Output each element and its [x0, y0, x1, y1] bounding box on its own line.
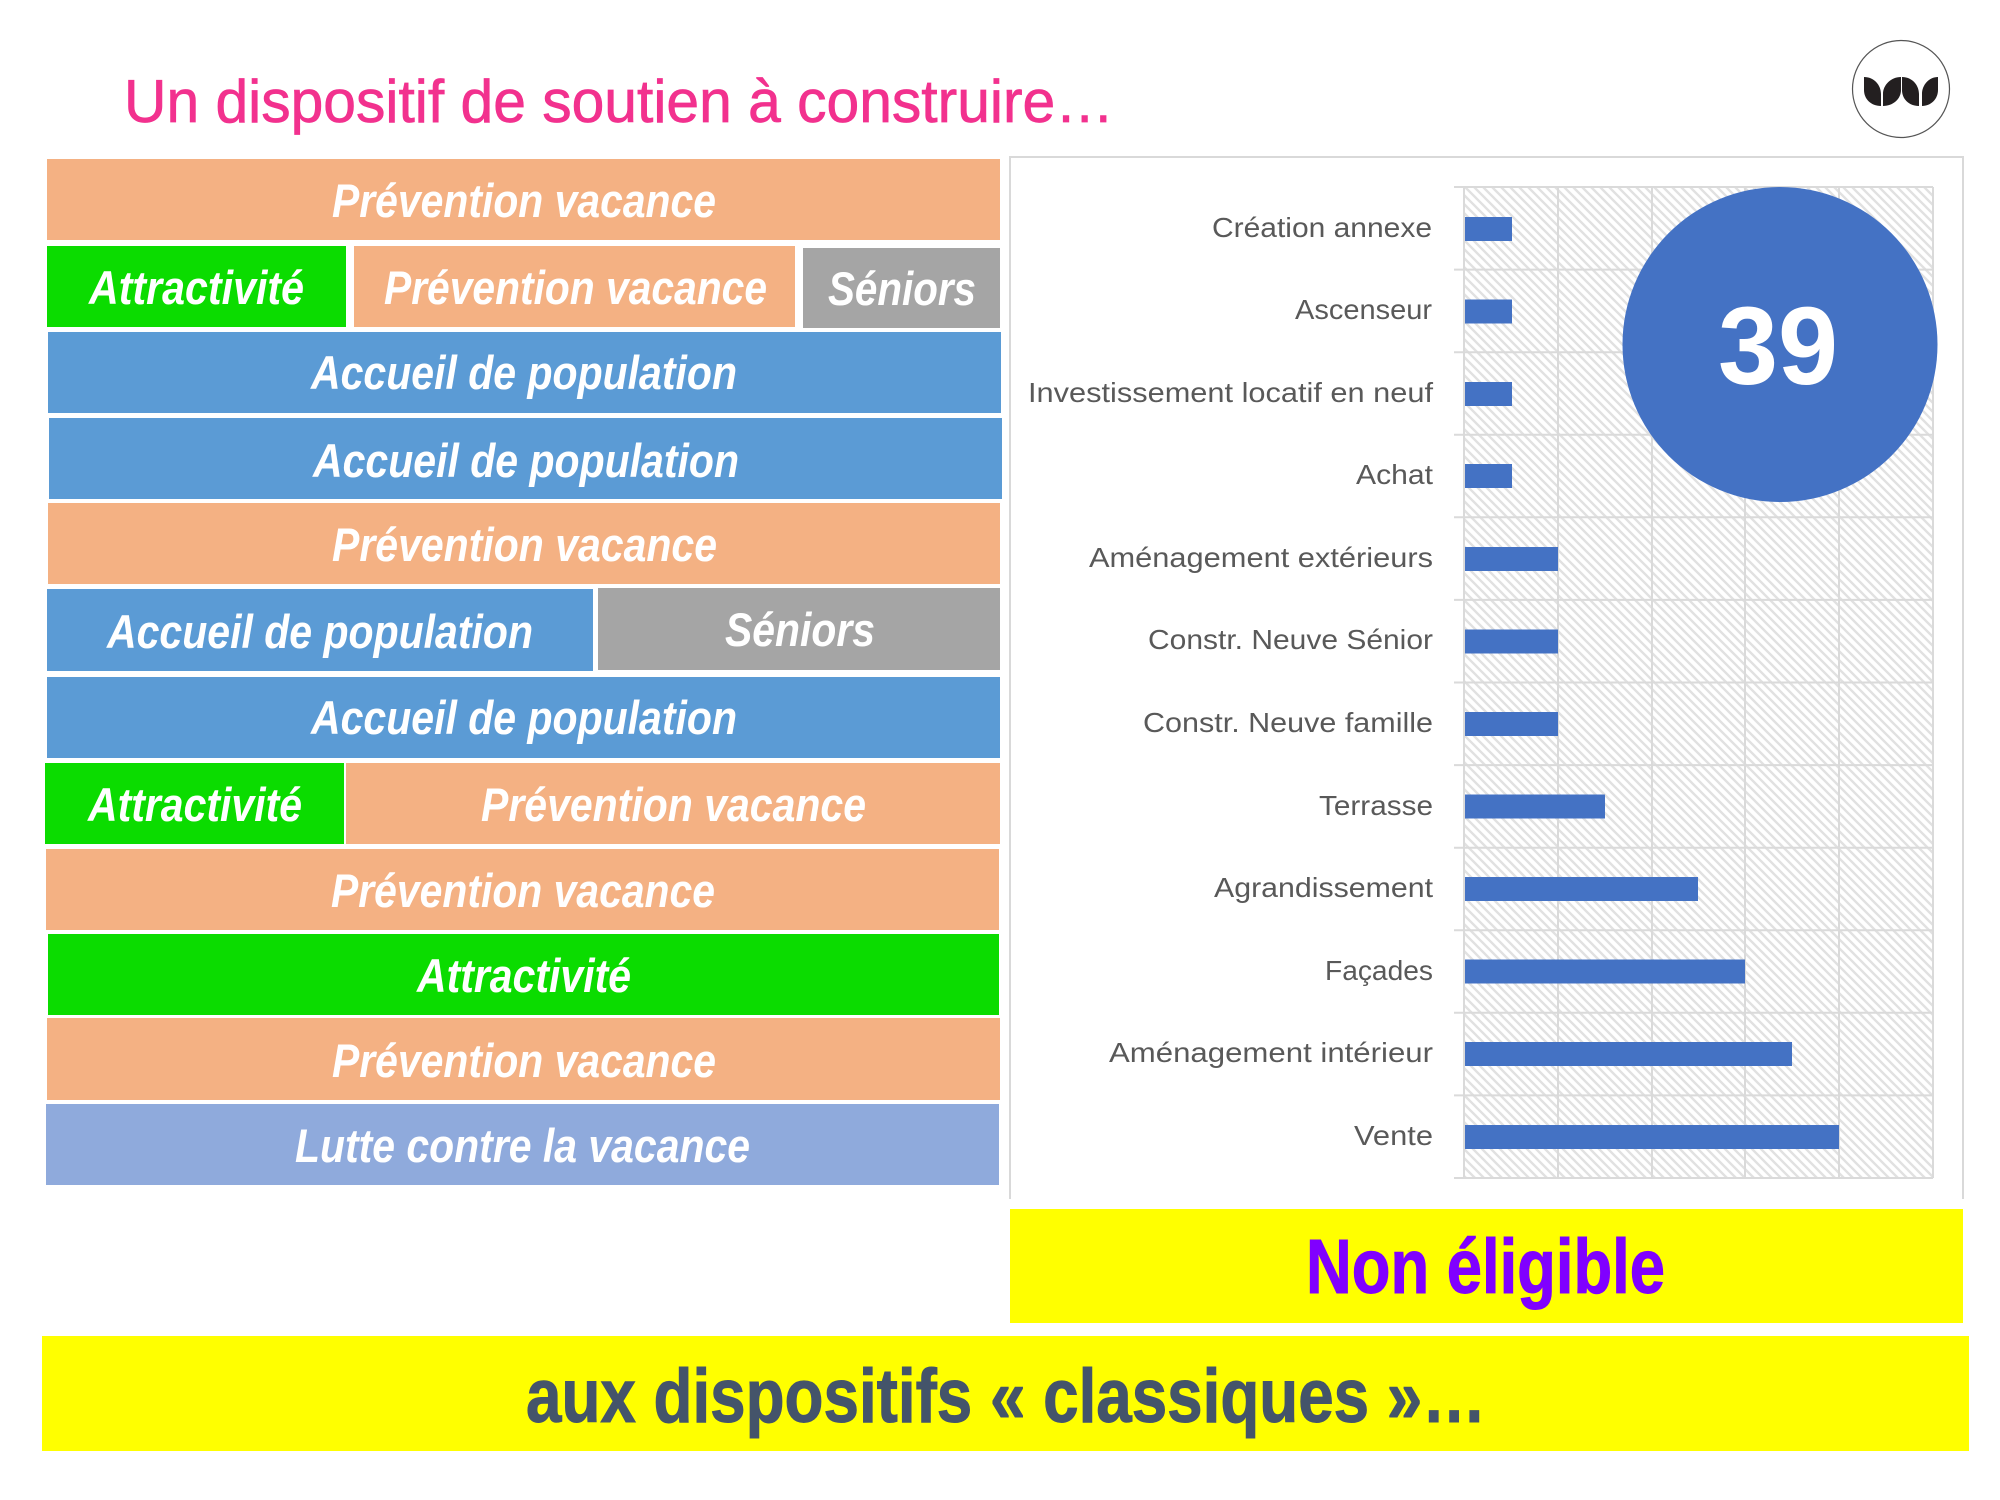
row 12: Lutte contre la vacance [46, 1104, 999, 1185]
row 1: Prévention vacance: Prévention vacance [332, 174, 716, 227]
row 9: Prévention vacance [46, 849, 999, 930]
row 6: Accueil de population [47, 589, 593, 671]
row 2: Séniors [803, 248, 1000, 328]
row 5: Prévention vacance: Prévention vacance [332, 518, 717, 571]
row 10: Attractivité [48, 934, 999, 1015]
row 8: Prévention vacance [346, 763, 1000, 844]
row 8: Prévention vacance: Prévention vacance [481, 778, 866, 831]
row 10: Attractivité: Attractivité [416, 949, 631, 1002]
row 5: Prévention vacance [48, 503, 1000, 584]
category labels: Aménagement intérieur [1109, 1037, 1433, 1068]
icon: logo [1852, 40, 1950, 138]
row 11: Prévention vacance [47, 1018, 1000, 1100]
category labels [1028, 212, 1433, 1151]
row 2: Séniors: Séniors [828, 262, 976, 315]
banner: aux dispositifs classiques [42, 1336, 1969, 1451]
row 2: Attractivité: Attractivité [88, 261, 304, 314]
banner: Non éligible [1010, 1209, 1963, 1323]
panel: bar chart [1010, 157, 1963, 1199]
row 2: Attractivité [47, 246, 346, 327]
category labels: Création annexe [1212, 212, 1432, 243]
category labels: Façades [1325, 955, 1433, 986]
row 6: Séniors [598, 588, 1000, 670]
category labels: Investissement locatif en neuf [1028, 377, 1433, 408]
callout: 39 circle: 39 [1718, 285, 1838, 408]
chart frame [1010, 157, 1963, 1199]
row 6: Accueil de population: Accueil de population [106, 605, 533, 658]
category labels: Ascenseur [1295, 294, 1432, 325]
callout: 39 circle [1622, 187, 1938, 502]
row 9: Prévention vacance: Prévention vacance [331, 864, 715, 917]
row 11: Prévention vacance: Prévention vacance [332, 1034, 716, 1087]
banner: Non éligible: Non éligible [1306, 1224, 1665, 1310]
panel: categories stack [45, 159, 1002, 1185]
chart plot area [1454, 187, 1933, 1178]
category labels: Achat [1356, 459, 1433, 490]
row 3: Accueil de population [48, 332, 1001, 413]
row 4: Accueil de population: Accueil de population [312, 434, 739, 487]
title: Un dispositif de soutien à construire… [124, 68, 1114, 135]
row 6: Séniors: Séniors [725, 603, 875, 656]
category labels: Constr. Neuve Sénior [1148, 624, 1433, 655]
row 2: Prévention vacance [354, 246, 795, 327]
row 12: Lutte contre la vacance: Lutte contre la vacance [295, 1119, 750, 1172]
category labels: Agrandissement [1214, 872, 1433, 903]
row 4: Accueil de population [49, 418, 1002, 499]
category labels: Terrasse [1319, 790, 1433, 821]
banner: aux dispositifs classiques: aux dispositifs « classiques »… [526, 1354, 1486, 1439]
row 8: Attractivité: Attractivité [87, 778, 302, 831]
row 7: Accueil de population [47, 677, 1000, 758]
bars [1465, 217, 1839, 1149]
row 8: Attractivité [45, 763, 344, 844]
row 7: Accueil de population: Accueil de population [310, 691, 737, 744]
row 2: Prévention vacance: Prévention vacance [384, 261, 767, 314]
category labels: Vente [1354, 1120, 1433, 1151]
row 1: Prévention vacance [47, 159, 1000, 240]
row 3: Accueil de population: Accueil de population [310, 346, 737, 399]
category labels: Constr. Neuve famille [1143, 707, 1433, 738]
category labels: Aménagement extérieurs [1089, 542, 1433, 573]
